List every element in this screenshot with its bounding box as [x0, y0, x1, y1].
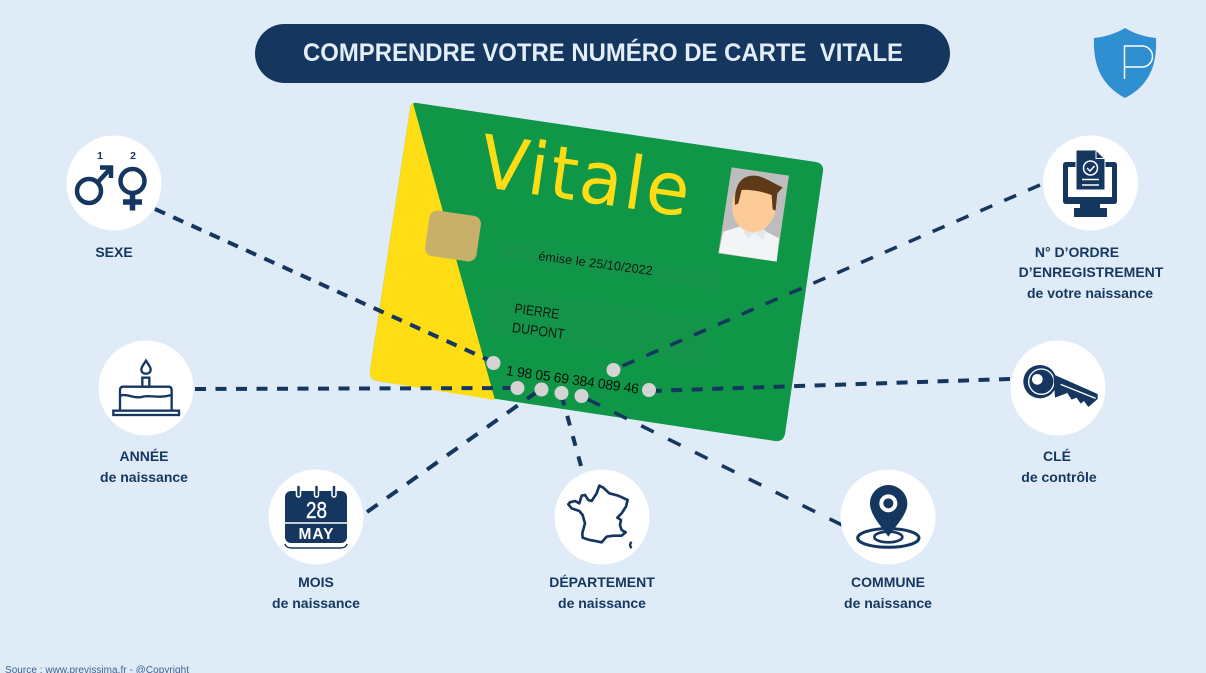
connector: commune: [581, 396, 842, 525]
icon: map of France: [568, 486, 631, 548]
connector: année: [195, 388, 517, 389]
label: commune: [844, 574, 932, 611]
connector: sexe: [155, 209, 493, 362]
title: COMPRENDRE VOTRE NUMÉRO DE CARTE VITALE: [303, 38, 903, 67]
card number: 1 98 05 69 384 089 46: [505, 362, 640, 397]
label: clé: de contrôle: [1021, 469, 1097, 485]
label: département: de naissance: [558, 595, 646, 611]
panel: sexe: [66, 136, 162, 260]
card photo: [718, 167, 789, 262]
card brand name: Vitale: [474, 119, 696, 234]
icon: calendar: MAY: [298, 526, 335, 543]
label: commune: COMMUNE: [851, 574, 925, 590]
icon: location pin: [858, 485, 919, 547]
label: ordre: N° D’ORDRE: [1035, 244, 1119, 260]
card holder name: PIERRE: [514, 300, 560, 322]
panel: commune: [840, 470, 936, 611]
label: mois: [272, 574, 360, 611]
icon: birthday cake: [113, 361, 179, 415]
label: ordre: D’ENREGISTREMENT: [1019, 264, 1164, 280]
number markers: [486, 356, 656, 403]
panel: mois: [268, 470, 364, 611]
vitale card: [370, 103, 823, 441]
connector: département: [561, 393, 581, 466]
label: département: DÉPARTEMENT: [549, 574, 655, 590]
icon: gender symbols: [77, 168, 144, 210]
connector: ordre: [613, 185, 1040, 370]
label: ordre: [1019, 244, 1164, 301]
card issue date: émise le 25/10/2022: [538, 249, 653, 278]
panel: année: [98, 340, 194, 485]
label: commune: de naissance: [844, 595, 932, 611]
label: année: ANNÉE: [119, 448, 169, 464]
card holder name: DUPONT: [511, 319, 566, 342]
icon: calendar: [285, 487, 347, 548]
panel: clé: [1010, 340, 1106, 485]
card holder name: [511, 300, 566, 342]
connector: mois: [367, 389, 541, 512]
icon: monitor with document: [1063, 150, 1117, 217]
label: clé: CLÉ: [1043, 448, 1071, 464]
card chip: [424, 209, 482, 263]
connector: clé: [649, 379, 1010, 391]
label: clé: [1021, 448, 1097, 485]
label: année: [100, 448, 188, 485]
icon: calendar: 28: [306, 497, 327, 523]
label: année: de naissance: [100, 469, 188, 485]
icon: key: [1023, 365, 1098, 407]
panel: sexe: 1: [97, 150, 103, 162]
label: ordre: de votre naissance: [1027, 285, 1153, 301]
label: mois: de naissance: [272, 595, 360, 611]
panel: département: [549, 470, 655, 611]
panel: ordre: [1019, 136, 1164, 301]
title: [255, 24, 950, 83]
label: département: [549, 574, 655, 611]
label: sexe: SEXE: [95, 244, 133, 260]
panel: sexe: 2: [130, 150, 136, 162]
label: mois: MOIS: [298, 574, 334, 590]
icon: logo shield: [1094, 28, 1156, 98]
card yellow band: [370, 103, 495, 400]
card faint field areas: [488, 241, 720, 364]
